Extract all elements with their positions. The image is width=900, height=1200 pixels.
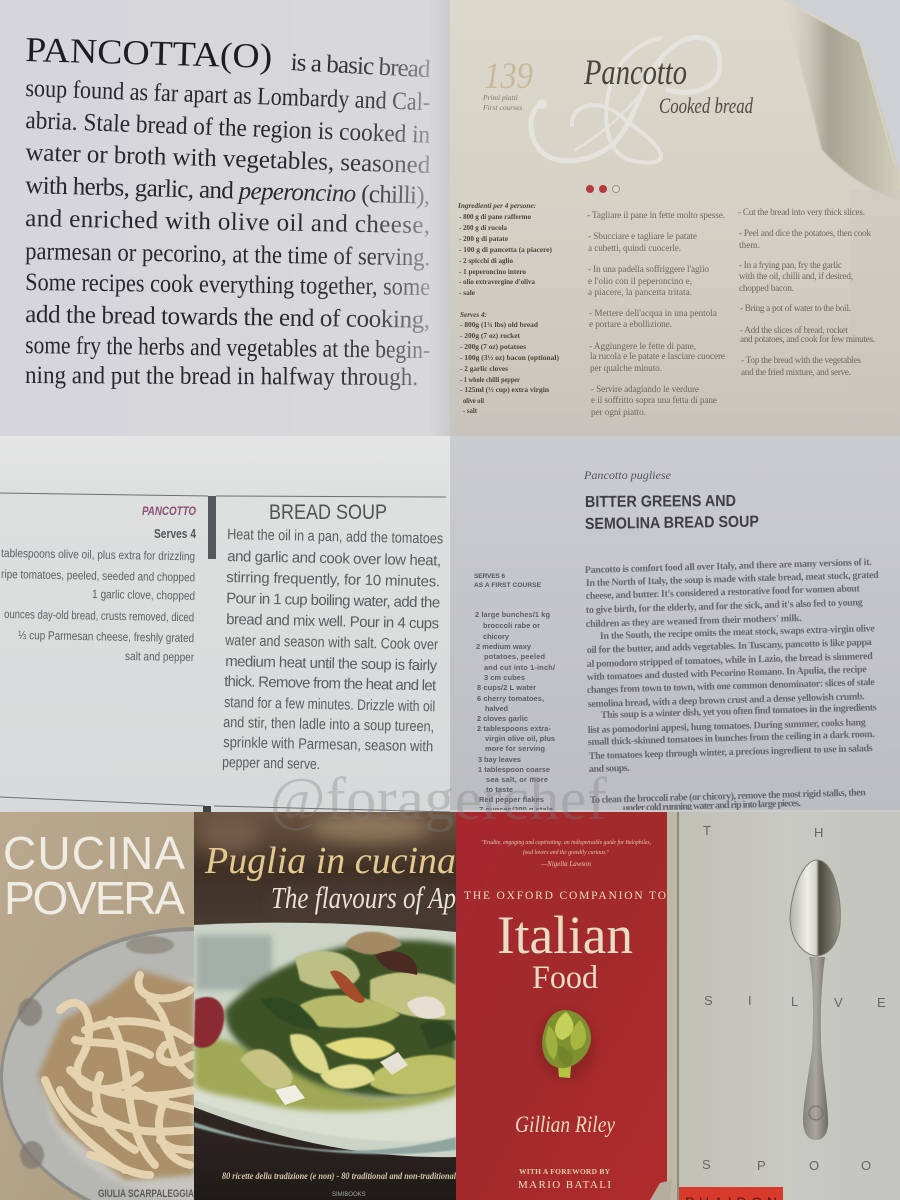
panel: Pancotto cooked bread recipe card [450, 0, 900, 436]
publisher: SIMIBOOKS [332, 1192, 366, 1198]
Italian method column: e portare a ebollizione. [589, 319, 672, 329]
Italian method column: a cubetti, quindi cuocerle. [588, 243, 681, 253]
salad and pasta [194, 932, 456, 1112]
method text: bread and mix well. Pour in 4 cups [226, 611, 439, 632]
ingredients: 7 ounces/200 g stale [479, 805, 553, 814]
ingredients [475, 610, 555, 814]
Italian method column: - Mettere dell'acqua in una pentola [589, 308, 717, 318]
title letters: THE SILVER SPOON: V [834, 995, 843, 1010]
ingredients list: - 125ml (½ cup) extra virgin [460, 385, 550, 394]
Italian method column: - Servire adagiando le verdure [591, 384, 699, 394]
serves note: SERVES 6 [474, 573, 505, 580]
body text: to give birth, for the elderly, and for the sick, and it's also fed to young [586, 597, 863, 616]
English method column: - Bring a pot of water to the boil. [740, 303, 851, 313]
body text: changes from town to town, with one common denominator: slices of stale [587, 677, 875, 696]
heading: bitter greens and semolina bread soup: SEMOLINA BREAD SOUP [585, 514, 759, 533]
method text: Pour in 1 cup boiling water, add the [226, 590, 440, 611]
quote [481, 839, 651, 868]
ingredients list: - 200g (7 oz) rocket [460, 331, 520, 340]
title letters: THE SILVER SPOON: O [861, 1158, 871, 1173]
ingredients list: - 200g (7 oz) potatoes [460, 342, 526, 351]
series title: THE OXFORD COMPANION TO [464, 890, 666, 902]
Italian method column: - In una padella soffriggere l'aglio [588, 264, 709, 274]
method text: stirring frequently, for 10 minutes. [226, 569, 440, 590]
quote: food lovers and the greedily curious." [523, 849, 609, 856]
body text: pancotta description: water or broth with vegetables, seasoned [25, 139, 431, 179]
body text: under cold running water and rip into large pieces. [623, 798, 801, 814]
body text: In the North of Italy, the soup is made with stale bread, meat stock, grated [586, 570, 879, 589]
serves note: AS A FIRST COURSE [474, 582, 542, 589]
Italian method column: - Sbucciare e tagliare le patate [588, 231, 697, 241]
ingredients: salt and pepper [125, 649, 194, 664]
English method column: - In a frying pan, fry the garlic [739, 260, 842, 270]
book cover: Puglia in cucina [194, 812, 456, 1200]
foreword author: MARIO BATALI [518, 1179, 611, 1191]
title: Food: Food [532, 960, 598, 996]
ingredients list: olive oil [463, 396, 484, 405]
ingredients list: - 200 g di patate [459, 234, 509, 243]
serves note [474, 574, 541, 587]
panel: Pancotta encyclopedia text [0, 0, 450, 436]
Italian method column: e l'olio con il peperoncino e, [588, 276, 692, 286]
decorative letter flourish [531, 37, 720, 163]
English method column: and potatoes, and cook for few minutes. [740, 334, 875, 344]
title letters: THE SILVER SPOON: L [791, 994, 798, 1009]
ingredients: Red pepper flakes [479, 795, 544, 804]
ingredients: 6 cherry tomatoes, [477, 694, 544, 703]
method text: medium heat until the soup is fairly [225, 653, 438, 674]
icon: silver spoon [790, 860, 840, 1140]
title: Cucina Povera: CUCINA [3, 827, 185, 879]
title: Cucina Povera: POVERA [4, 872, 185, 924]
English method column: with the oil, chilli and, if desired, [739, 271, 853, 281]
body text: and soups. [589, 763, 630, 775]
difficulty dots [586, 185, 620, 193]
ingredients: sea salt, or more [486, 775, 548, 784]
English method column: - Peel and dice the potatoes, then cook [739, 228, 871, 238]
title: Cucina Povera [5, 836, 185, 914]
subtitle: Cooked bread: Cooked bread [659, 93, 754, 118]
ingredients: ripe tomatoes, peeled, seeded and chopped [1, 567, 195, 584]
body text: The tomatoes keep through winter, a precious ingredient to use in salads [589, 743, 873, 762]
English method column [738, 207, 875, 377]
Italian method column: a piacere, la pancetta tritata. [588, 287, 692, 297]
ingredients: virgin olive oil, plus [485, 734, 555, 743]
title letters: THE SILVER SPOON: H [814, 825, 823, 840]
body text: pancotta description: Some recipes cook everything together, some [25, 269, 430, 301]
ingredients list: - 100g (3½ oz) bacon (optional) [460, 353, 559, 362]
body text: pancotta description: add the bread towards the end of cooking, [25, 301, 430, 334]
title: Pancotto: Pancotto [583, 52, 687, 92]
method text: and stir, then ladle into a soup tureen, [223, 714, 434, 735]
title letters: THE SILVER SPOON: E [877, 995, 886, 1010]
folded page corner [782, 0, 900, 436]
ingredients list: - 800g (1¾ lbs) old bread [460, 320, 539, 329]
title letters: THE SILVER SPOON: I [748, 993, 752, 1008]
section label: First courses [482, 103, 522, 112]
foreword label: WITH A FOREWORD BY [519, 1167, 611, 1176]
ingredients: 2 cloves garlic [477, 714, 528, 723]
plate [194, 923, 456, 1157]
ingredients: to taste [486, 785, 513, 794]
body text: oil for the butter, and adds vegetables. In Tuscany, pancotto is like pappa [587, 637, 872, 656]
body text: This soup is a winter dish, yet you often find tomatoes in the ingredients [601, 702, 877, 721]
English method column: them. [739, 240, 760, 250]
body text [585, 557, 879, 814]
title letters: THE SILVER SPOON: P [757, 1158, 766, 1173]
title letters: THE SILVER SPOON: S [702, 1157, 711, 1172]
ingredients: 2 medium waxy [476, 642, 532, 651]
label: PANCOTTO: PANCOTTO [142, 506, 196, 518]
body text: pancotta description: and enriched with olive oil and cheese, [25, 205, 430, 239]
body text: In the South, the recipe omits the meat stock, swaps extra-virgin olive [600, 623, 875, 642]
body text: small thick-skinned tomatoes in bunches from the ceiling in a dark room. [588, 729, 875, 748]
ingredients: and cut into 1-inch/ [484, 663, 555, 672]
author name: GIULIA SCARPALEGGIA [98, 1188, 194, 1200]
ingredients list: - 1 peperoncino intero [459, 267, 526, 276]
method text: pepper and serve. [222, 754, 320, 773]
body text: semolina bread, with a deep brown crust and a dense yellowish crumb. [588, 691, 865, 710]
body text: al pomodoro stripped of tomatoes, while in Lazio, the bread is simmered [587, 651, 873, 670]
method text: stand for a few minutes. Drizzle with oil [224, 694, 435, 715]
heading: bitter greens and semolina bread soup [585, 495, 758, 530]
method text: thick. Remove from the heat and let [224, 673, 437, 694]
icon: artichoke [536, 1009, 596, 1081]
body text: pancotta description: with herbs, garlic, and peperoncino (chilli), [25, 172, 431, 210]
ingredients list: Ingredienti per 4 persone: [457, 201, 536, 210]
method text: sprinkle with Parmesan, season with [223, 734, 433, 755]
ingredients list: - 800 g di pane raffermo [459, 212, 531, 221]
mottled background [199, 812, 432, 904]
body text: with tomatoes and dusted with Pecorino Romano. In Apulia, the recipe [587, 664, 867, 683]
watermark: @foragerchef: @foragerchef [270, 766, 607, 832]
author: Gillian Riley: Gillian Riley [515, 1112, 616, 1137]
ingredients: 8 cups/2 L water [477, 683, 536, 692]
method text: Heat the oil in a pan, add the tomatoes [227, 526, 443, 548]
Italian method column: la rucola e le patate e lasciare cuocere [590, 351, 725, 361]
heading: bitter greens and semolina bread soup: BITTER GREENS AND [585, 493, 736, 511]
ingredients: 2 tablespoons extra- [477, 724, 552, 733]
body text: pancotta description: abria. Stale bread of the region is cooked in [25, 107, 431, 149]
body text: pancotta description: parmesan or pecorino, at the time of serving. [25, 238, 430, 271]
method text [222, 526, 443, 773]
ingredients: more for serving [485, 744, 545, 753]
panel: Pancotto pugliese recipe [450, 471, 900, 810]
panel: Bread soup recipe [0, 436, 450, 812]
English method column: chopped bacon. [739, 283, 794, 293]
ingredients: tablespoons olive oil, plus extra for drizzling [1, 546, 195, 563]
ingredients: broccoli rabe or [483, 621, 540, 630]
ingredients: ounces day-old bread, crusts removed, diced [4, 607, 194, 624]
pasta [38, 970, 194, 1180]
heading: BREAD SOUP: BREAD SOUP [269, 501, 387, 524]
method text: water and season with salt. Cook over [224, 632, 438, 653]
body text: pancotta description: soup found as far apart as Lombardy and Cal- [25, 75, 431, 116]
English method column: and the fried mixture, and serve. [741, 367, 851, 377]
ingredients: 2 large bunches/1 kg [475, 610, 550, 619]
page number 139: 139 [484, 56, 533, 97]
title letters: THE SILVER SPOON [702, 823, 886, 1173]
publisher band [679, 1187, 783, 1200]
ingredients: 3 bay leaves [478, 755, 521, 764]
ingredients list: - olio extravergine d'oliva [459, 277, 535, 286]
ingredients list: - 2 garlic cloves [460, 364, 508, 373]
Italian method column: - Aggiungere le fette di pane, [589, 341, 696, 351]
body text: pancotta description [25, 49, 432, 391]
body text: list as pomodorini appesi, hung tomatoes. During summer, cooks hang [588, 717, 866, 736]
title letters: THE SILVER SPOON: T [703, 823, 711, 838]
book cover: The Silver Spoon [679, 812, 900, 1200]
book cover: Oxford Companion to Italian Food [456, 812, 668, 1200]
body text: pancotta description: is a basic bread [290, 49, 432, 83]
Italian method column [587, 210, 725, 417]
subtitle: The flavours of Apulia: The flavours of Ap [271, 880, 456, 915]
ingredients: 3 cm cubes [484, 673, 525, 682]
method text: and garlic and cook over low heat, [227, 548, 441, 569]
ingredients list: - 200 g di rucola [459, 223, 507, 232]
title: Puglia in cucina: Puglia in cucina [204, 840, 456, 882]
ingredients: potatoes, peeled [484, 652, 545, 661]
Italian method column: per qualche minuto. [590, 363, 662, 373]
title letters: THE SILVER SPOON: O [809, 1158, 819, 1173]
ingredients list: - 2 spicchi di aglio [459, 256, 513, 265]
ingredients list: - 100 g di pancetta (a piacere) [459, 245, 552, 254]
ingredients: chicory [483, 632, 510, 641]
English method column: - Add the slices of bread, rocket [740, 325, 848, 335]
body text: pancotta description: ning and put the bread in halfway through. [25, 362, 418, 391]
English method column: - Top the bread with the vegetables [741, 355, 861, 365]
quote: "Erudite, engaging and captivating: an indispensable guide for Italophiles, [481, 839, 651, 846]
ingredients: 1 tablespoon coarse [478, 765, 550, 774]
ingredients [1, 546, 195, 664]
ingredients list: - salt [463, 406, 477, 415]
body text: Pancotto is comfort food all over Italy, and there are many versions of it. [585, 557, 872, 576]
ingredients list: - 1 whole chilli pepper [460, 375, 521, 384]
plate [0, 927, 194, 1200]
tagline: 80 ricette della tradizione (e non) - 80 traditional and non-traditional [222, 1171, 456, 1181]
title letters: THE SILVER SPOON: S [704, 993, 713, 1008]
ingredients list: - sale [459, 288, 476, 297]
Italian method column: - Tagliare il pane in fette molto spesse. [587, 210, 725, 220]
book cover: Cucina Povera [0, 812, 194, 1200]
subtitle: Pancotto pugliese: Pancotto pugliese [583, 468, 672, 482]
body text: children as they are weaned from their mothers' milk. [586, 613, 802, 630]
quote: —Nigella Lawson [540, 859, 591, 868]
English method column: - Cut the bread into very thick slices. [738, 207, 865, 217]
ingredients: 1 garlic clove, chopped [92, 587, 195, 603]
section label: Primi piatti [482, 93, 518, 102]
Italian method column: per ogni piatto. [591, 407, 646, 417]
body text: cheese, and butter. It's considered a restorative food for women about [586, 583, 861, 602]
body text: pancotta description: some fry the herbs and vegetables at the begin- [25, 332, 430, 364]
body text: To clean the broccoli rabe (or chicory), remove the most rigid stalks, then [590, 787, 866, 806]
book spine edge [650, 812, 679, 1200]
ingredients list [457, 201, 559, 415]
rules and vertical bar [0, 493, 450, 812]
ingredients: ⅓ cup Parmesan cheese, freshly grated [18, 628, 194, 645]
ingredients list: Serves 4: [460, 310, 487, 319]
label: Serves 4: Serves 4 [154, 527, 196, 541]
Italian method column: e il soffritto sopra una fetta di pane [591, 395, 717, 405]
heading: PANCOTTA(O): PANCOTTA(O) [25, 30, 273, 76]
title: Italian: Italian [497, 905, 633, 965]
ingredients: halved [485, 704, 508, 713]
section label [482, 93, 522, 112]
